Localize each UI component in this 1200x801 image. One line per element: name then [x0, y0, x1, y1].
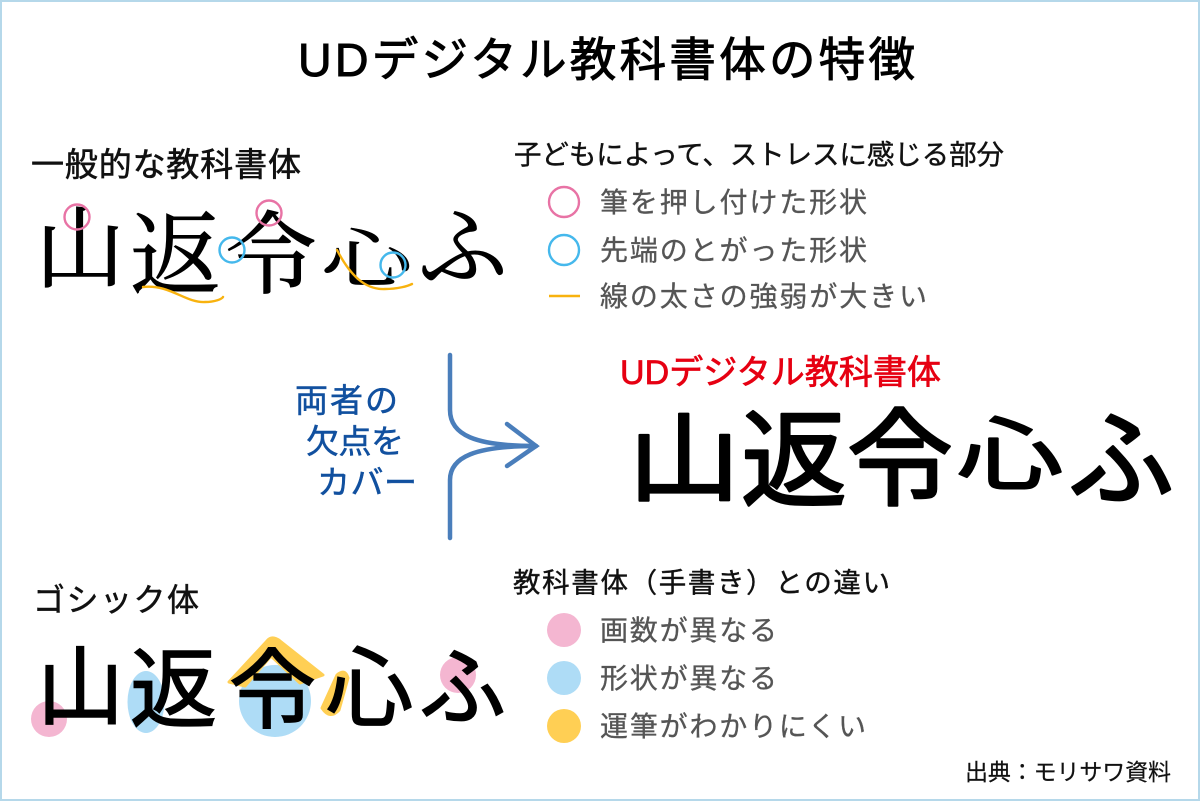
sample glyphs: UD font: 令: [847, 402, 953, 520]
callout: cover weaknesses of both: 欠点を: [306, 423, 404, 460]
callout: cover weaknesses of both: 両者の: [295, 382, 398, 419]
callout: cover weaknesses of both: カバー: [317, 464, 417, 501]
sample glyphs: textbook font: 山: [35, 176, 125, 306]
panel: differences legend: [513, 567, 890, 743]
sample glyphs: textbook font: ふ: [418, 175, 508, 305]
legend item: stroke order unclear: 運筆がわかりにくい: [600, 711, 866, 742]
sample glyphs: textbook font: 返: [130, 182, 220, 312]
pink circle markers: [64, 200, 282, 230]
heading: UD digital textbook font: UDデジタル教科書体: [620, 354, 941, 392]
highlight shapes: [31, 638, 476, 737]
heading: differences legend: 教科書体（手書き）との違い: [513, 567, 890, 598]
sample glyphs: gothic font: 返: [130, 642, 217, 739]
sample glyphs: gothic font: 心: [326, 641, 413, 738]
heading: general textbook font: 一般的な教科書体: [31, 146, 301, 183]
blue circle markers: [220, 238, 406, 278]
sample glyphs: textbook font: 令: [226, 182, 316, 312]
sample glyphs: textbook font: [35, 175, 508, 312]
sample glyphs: gothic font: 令: [229, 643, 316, 740]
legend item: stroke contrast: 線の太さの強弱が大きい: [600, 281, 927, 312]
title: UDデジタル教科書体の特徴: [298, 34, 915, 86]
heading: gothic font: ゴシック体: [33, 582, 199, 618]
sample glyphs: textbook font: 心: [322, 207, 417, 300]
panel: UD digital textbook font: [620, 354, 1174, 521]
sample glyphs: UD font: [628, 402, 1174, 521]
sample glyphs: UD font: ふ: [1068, 402, 1174, 520]
panel: stress legend: [514, 139, 1004, 312]
sample glyphs: gothic font: ふ: [419, 640, 506, 737]
legend item: pressed brush shape: 筆を押し付けた形状: [600, 187, 867, 218]
callout: cover weaknesses of both: [295, 382, 417, 501]
sample glyphs: UD font: 心: [957, 411, 1063, 500]
source note: 出典：モリサワ資料: [965, 759, 1171, 785]
sample glyphs: UD font: 返: [741, 403, 847, 521]
sample glyphs: gothic font: 山: [37, 640, 124, 737]
sample glyphs: gothic font: [37, 640, 506, 740]
yellow contrast lines: [143, 250, 412, 302]
sample glyphs: UD font: 山: [628, 407, 740, 515]
panel: general textbook font: [31, 146, 508, 312]
legend item: shape differs: 形状が異なる: [600, 663, 777, 694]
legend item: stroke count differs: 画数が異なる: [600, 615, 777, 646]
panel: gothic font: [31, 582, 506, 740]
merge arrow: [450, 355, 536, 538]
heading: stress legend: 子どもによって、ストレスに感じる部分: [514, 139, 1004, 170]
legend item: pointed shape: 先端のとがった形状: [600, 235, 867, 266]
